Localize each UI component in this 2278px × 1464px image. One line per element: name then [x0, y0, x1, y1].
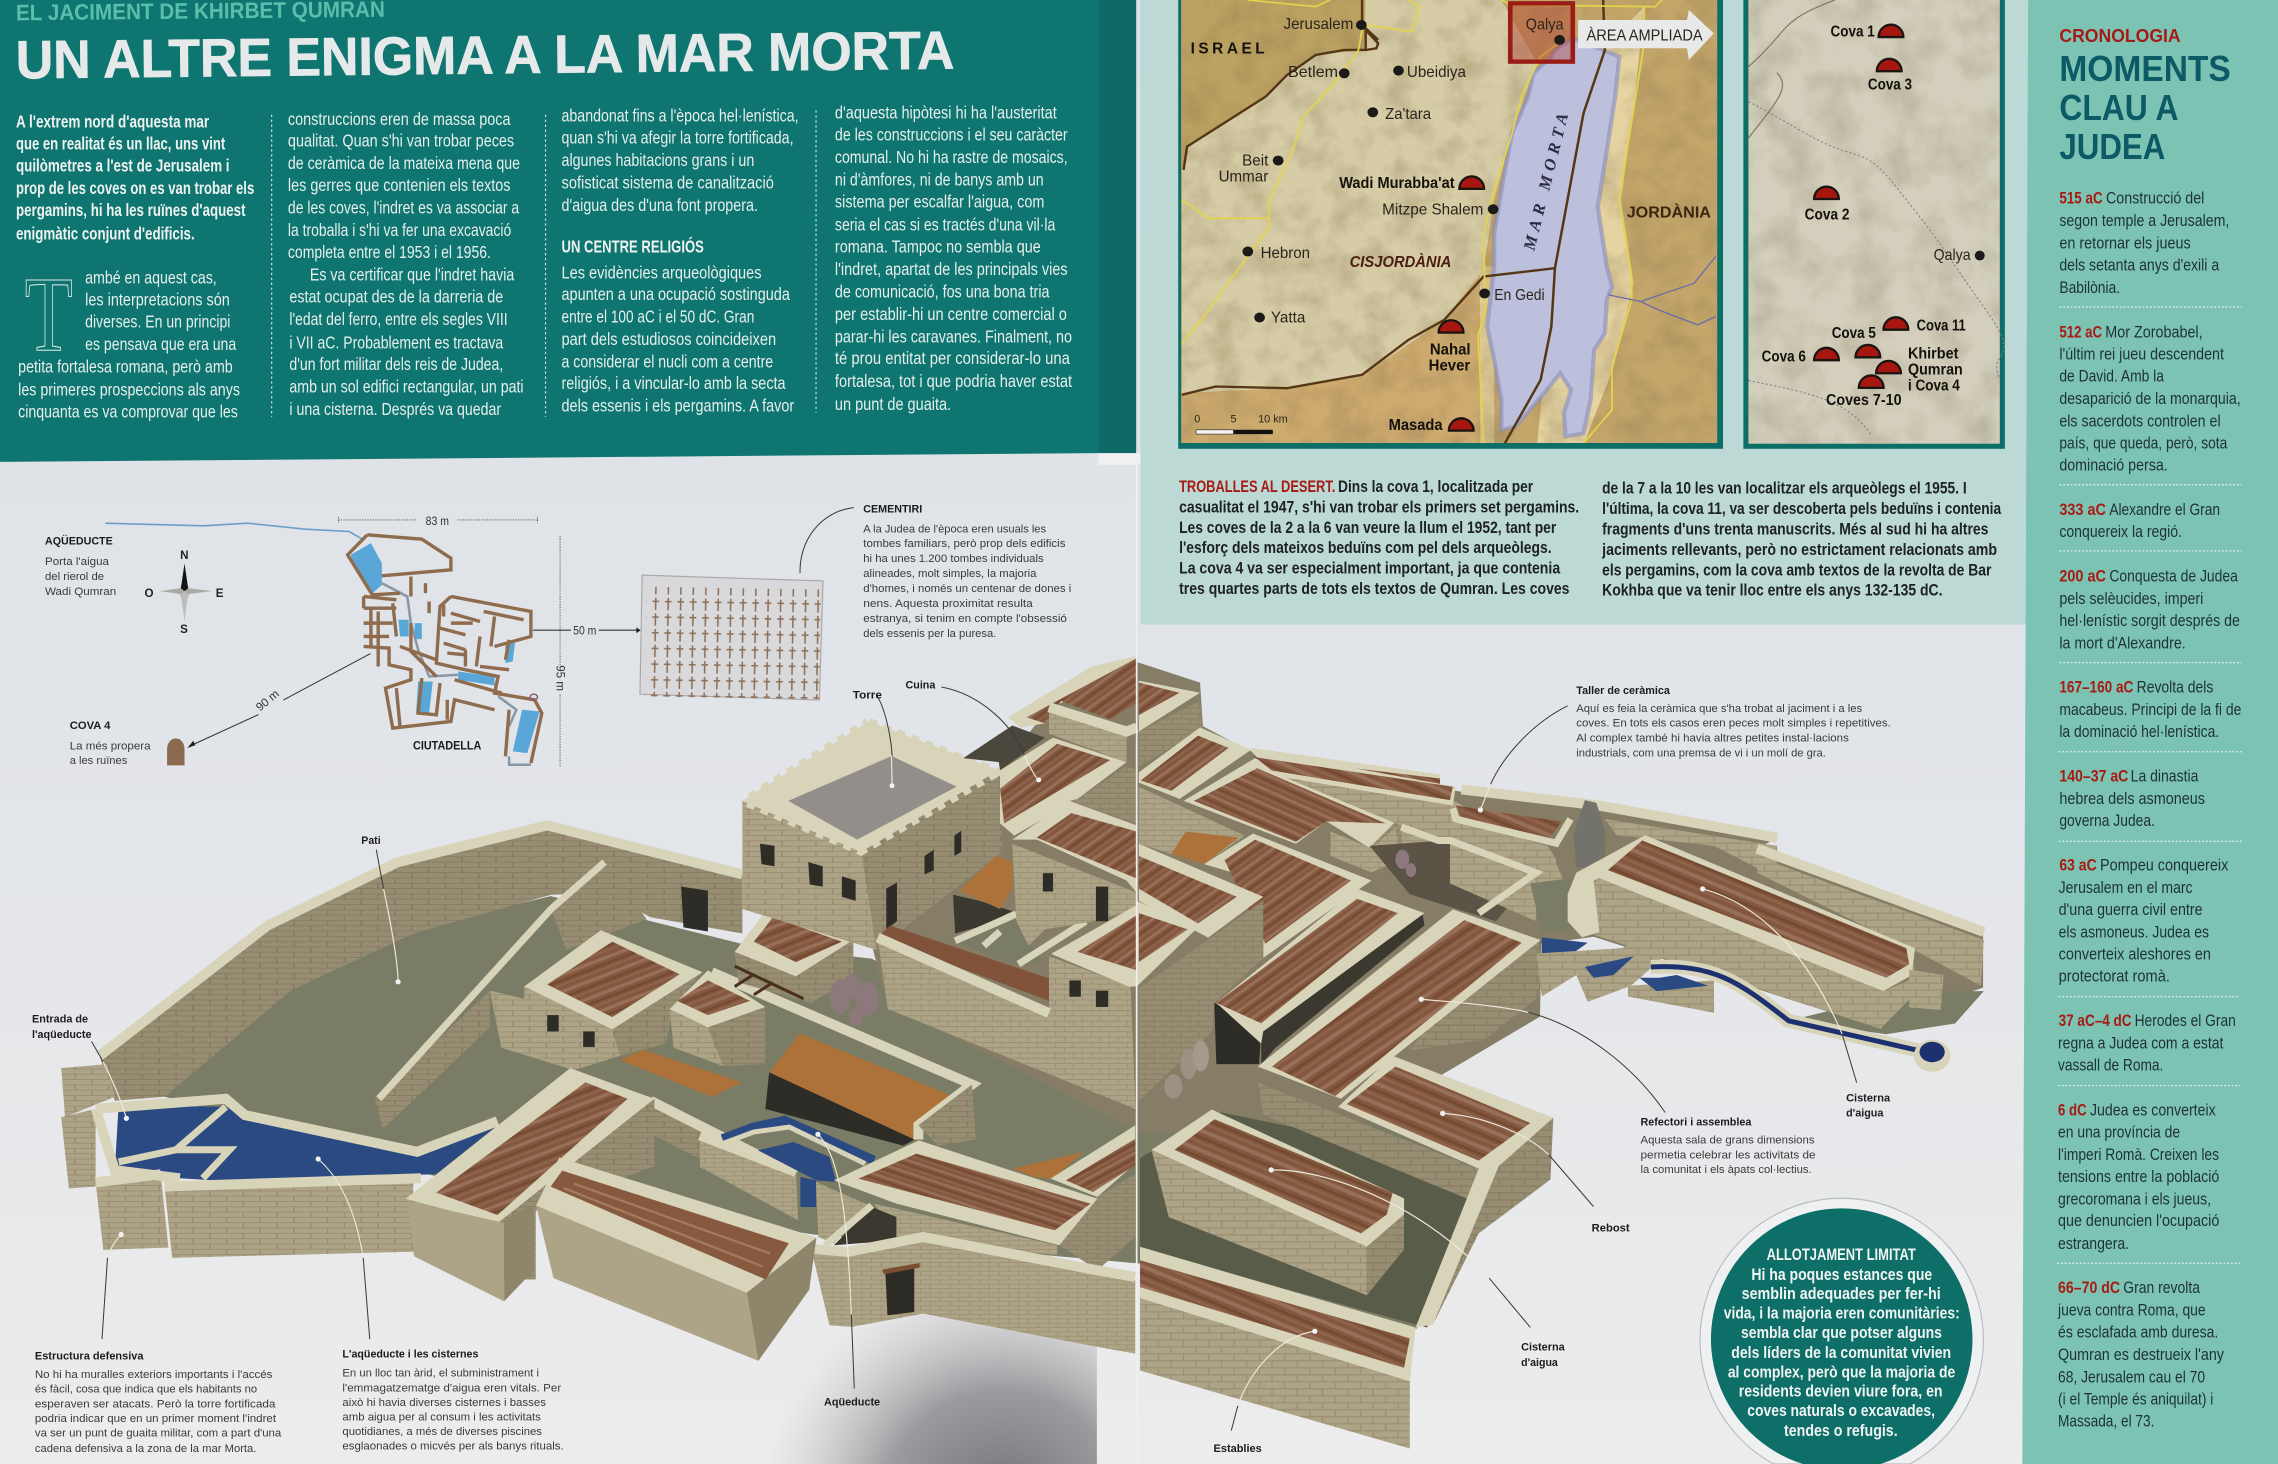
text column 4: ni d'àmfores, ni de banys amb un: [835, 169, 1044, 189]
site plan of Qumran: 90 m: [254, 687, 282, 714]
callout: Entrada de l'aqueducte: [32, 1013, 129, 1121]
callout: cemetery text: dels essenis per la puresa.: [863, 628, 996, 640]
text column 1: prop de les coves on es van trobar els: [16, 178, 254, 198]
text column 1: enigmàtic conjunt d'edificis.: [16, 223, 195, 243]
timeline entry 512 aC: Mor Zorobabel,: [2105, 324, 2203, 342]
text column 2: estat ocupat des de la darreria de: [289, 287, 503, 307]
text column 2: amb un sol edifici rectangular, un pati: [289, 377, 524, 397]
label: cave 4: COVA 4: [70, 720, 111, 732]
timeline entry 515 aC: segon temple a Jerusalem,: [2059, 212, 2229, 230]
text column 3: a considerar el nucli com a centre: [562, 351, 773, 371]
callout: Establies: [1214, 1329, 1317, 1455]
site plan of Qumran: 83 m: [426, 515, 449, 528]
timeline entry 167-160 aC: macabeus. Principi de la fi de: [2059, 701, 2241, 719]
timeline entry 6 dC: tensions entre la població: [2058, 1168, 2219, 1186]
callout: Cisterna (lower): [1269, 1167, 1565, 1369]
text block: troballes al desert: l'última, la cova 11, va ser descoberta pels beduïns i contenia: [1602, 500, 2002, 518]
map: enlarged cave area: Qumran: [1908, 361, 1963, 378]
timeline entry 66-70 dC: Gran revolta: [2123, 1279, 2201, 1297]
map: Dead Sea region: Hever: [1429, 357, 1470, 374]
timeline entry 6 dC: en una província de: [2058, 1123, 2180, 1141]
callout: Pati: Pati: [361, 835, 381, 847]
text column 3: UN CENTRE RELIGIÓS: [562, 236, 704, 257]
map: Dead Sea region: Qalya: [1526, 16, 1564, 33]
timeline entry 167-160 aC: [2059, 679, 2241, 741]
timeline entry 63 aC: els asmoneus. Judea es: [2059, 924, 2209, 942]
callout: Refectori i assemblea: permetia celebrar les activitats de: [1641, 1150, 1816, 1162]
callout: l'aqueducte i les cisternes: esglaonades o micvés per als banys rituals.: [342, 1440, 564, 1452]
callout: Taller de ceramica: [1478, 685, 1891, 812]
label: aqueduct note: del rierol de: [45, 571, 104, 583]
panel: chronology: JUDEA: [2059, 126, 2165, 167]
text column 2: de les coves, l'indret es va associar a: [288, 198, 519, 218]
callout circle: allotjament limitat: sembla clar que potser alguns: [1741, 1324, 1942, 1342]
timeline entry 515 aC: Construcció del: [2106, 190, 2204, 208]
timeline entry 512 aC: dominació persa.: [2059, 457, 2168, 475]
icon: compass: E: [216, 587, 224, 600]
text column 3: quan s'hi va afegir la torre fortificada,: [562, 128, 794, 148]
timeline entry 333 aC: 333 aC: [2059, 501, 2106, 519]
label: aqueduct note: AQÜEDUCTE: [45, 535, 113, 548]
text column 2: les gerres que contenien els textos: [288, 175, 511, 195]
callout: Aqueducte: [815, 1132, 880, 1408]
text block: troballes al desert: casualitat el 1947, s'hi van trobar els primers set pergamins.: [1179, 498, 1579, 516]
callout circle: allotjament limitat: vida, i la majoria eren comunitàries:: [1724, 1305, 1960, 1323]
map: enlarged cave area: Cova 6: [1762, 349, 1806, 366]
text column 4: [835, 102, 1072, 414]
text column 4: té prou entitat per considerar-lo una: [835, 348, 1070, 368]
callout: Rebost: [1440, 1111, 1630, 1235]
label: cave 4: [70, 720, 185, 767]
callout: Refectori i assemblea: la comunitat i els àpats col·lectius.: [1641, 1164, 1812, 1176]
map: Dead Sea region: Ubeidiya: [1407, 64, 1466, 81]
panel: chronology: MOMENTS: [2059, 48, 2231, 89]
callout: Taller de ceramica: coves. En tots els casos eren peces molt simples i repetitives.: [1576, 717, 1891, 729]
timeline entry 63 aC: [2059, 857, 2228, 986]
callout circle: allotjament limitat: Hi ha poques estances que: [1751, 1266, 1932, 1284]
callout: cemetery text: [800, 504, 1071, 640]
text column 2: qualitat. Quan s'hi van trobar peces: [288, 131, 514, 151]
timeline entry 512 aC: l'últim rei jueu descendent: [2059, 346, 2224, 364]
map: Dead Sea region: [1178, 0, 1723, 449]
callout: l'aqueducte i les cisternes: [316, 1156, 564, 1452]
timeline entry 512 aC: desaparició de la monarquia,: [2059, 390, 2241, 408]
north-east workshops, kiln and long roofed hall: [1249, 749, 1984, 1072]
map: Dead Sea region: 0: [1194, 414, 1200, 426]
text column 1: quilòmetres a l'est de Jerusalem i: [16, 156, 230, 176]
timeline entry 66-70 dC: 66–70 dC: [2058, 1279, 2120, 1297]
text block: troballes al desert: els pergamins, com la cova amb textos de la revolta de Bar: [1602, 561, 1992, 579]
timeline entry 140-37 aC: hebrea dels asmoneus: [2059, 790, 2205, 808]
ground: courtyard paving: [164, 896, 1482, 1329]
text column 3: religiós, i a vincular-lo amb la secta: [562, 373, 786, 393]
timeline entry 63 aC: protectorat romà.: [2059, 968, 2170, 986]
text column 4: de les construccions i el seu caràcter: [835, 125, 1068, 145]
timeline entry 200 aC: la mort d'Alexandre.: [2059, 634, 2186, 652]
text column 1: cinquanta es va comprovar que les: [18, 402, 238, 422]
timeline entry 37 aC-4 dC: Herodes el Gran: [2135, 1012, 2236, 1030]
map: Dead Sea region: Za'tara: [1385, 106, 1431, 123]
central tower: [742, 721, 1003, 950]
callout: Refectori i assemblea: Refectori i assemblea: [1641, 1117, 1752, 1129]
timeline entry 512 aC: [2059, 324, 2241, 475]
text column 1: petita fortalesa romana, però amb: [18, 357, 233, 377]
timeline entry 140-37 aC: La dinastia: [2131, 768, 2199, 786]
text column 2: construccions eren de massa poca: [288, 109, 511, 129]
map: enlarged cave area: Cova 5: [1832, 325, 1876, 342]
callout: Cisterna (right): [1700, 886, 1891, 1120]
callout: cemetery text: CEMENTIRI: [863, 504, 922, 516]
map: Dead Sea region: Nahal: [1430, 341, 1471, 358]
timeline entry 515 aC: [2059, 190, 2229, 297]
callout: Estructura defensiva: va ser un punt de guaita militar, com a part d'una: [35, 1427, 282, 1439]
illustration: Qumran complex, isometric reconstruction: [61, 656, 1984, 1449]
callout: Torre: Torre: [853, 690, 882, 702]
timeline entry 6 dC: 6 dC: [2058, 1101, 2087, 1119]
site plan of Qumran: CIUTADELLA: [413, 739, 482, 752]
panel: chronology: [2022, 0, 2278, 1464]
text column 3: sofisticat sistema de canalització: [562, 172, 774, 192]
cemetery diagram: [640, 575, 823, 700]
map: Dead Sea region: JORDÀNIA: [1627, 202, 1711, 221]
callout: Rebost: Rebost: [1592, 1223, 1630, 1235]
map: Dead Sea region: Masada: [1389, 417, 1443, 434]
label: cave 4: La més propera: [70, 740, 151, 752]
site plan of Qumran: [105, 515, 641, 767]
timeline entry 66-70 dC: (i el Temple és aniquilat) i: [2058, 1391, 2213, 1409]
text column 3: entre el 100 aC i el 50 dC. Gran: [562, 307, 754, 327]
text column 3: Les evidències arqueològiques: [562, 262, 762, 282]
map: Dead Sea region: Jerusalem: [1284, 16, 1353, 33]
text column 4: parar-hi les caravanes. Finalment, no: [835, 326, 1072, 346]
timeline entry 66-70 dC: Qumran es destrueix l'any: [2058, 1346, 2225, 1364]
timeline entry 515 aC: Babilònia.: [2059, 279, 2120, 297]
timeline entry 515 aC: en retornar els jueus: [2059, 234, 2191, 252]
map: Dead Sea region: Beit: [1242, 153, 1269, 170]
timeline entry 66-70 dC: 68, Jerusalem cau el 70: [2058, 1369, 2205, 1387]
label: aqueduct note: Porta l'aigua: [45, 556, 110, 568]
map: enlarged cave area: Cova 3: [1868, 76, 1912, 93]
map: Dead Sea region: 10 km: [1258, 414, 1288, 426]
timeline entry 63 aC: Jerusalem en el marc: [2059, 879, 2193, 897]
callout: Estructura defensiva: Estructura defensiva: [35, 1350, 144, 1362]
callout: Estructura defensiva: [35, 1232, 282, 1455]
icon: compass: S: [180, 623, 188, 636]
map: Dead Sea region: MAR MORTA: [1519, 111, 1572, 253]
timeline entry 167-160 aC: la dominació hel·lenística.: [2059, 723, 2219, 741]
timeline entry 37 aC-4 dC: 37 aC–4 dC: [2059, 1012, 2132, 1030]
text column 4: l'indret, apartat de les principals vies: [835, 259, 1068, 279]
timeline entry 515 aC: dels setanta anys d'exili a: [2059, 257, 2220, 275]
timeline entry 6 dC: l'imperi Romà. Creixen les: [2058, 1146, 2219, 1164]
map: Dead Sea region: CISJORDÀNIA: [1350, 254, 1451, 271]
map: Dead Sea region: 5: [1231, 414, 1237, 426]
text block: troballes al desert: de la 7 a la 10 les van localitzar els arqueòlegs el 1955. I: [1602, 479, 1967, 497]
map: Dead Sea region: Hebron: [1261, 245, 1310, 262]
callout: Cisterna (lower): d'aigua: [1521, 1357, 1558, 1369]
timeline entry 66-70 dC: Massada, el 73.: [2058, 1413, 2154, 1431]
panel: maps and finds: [1140, 0, 2028, 625]
text column 4: per establir-hi un centre comercial o: [835, 304, 1067, 324]
text column 2: i una cisterna. Després va quedar: [289, 399, 501, 419]
masonry mass behind the roofs: [872, 661, 1983, 1133]
callout: Cuina: Cuina: [906, 679, 936, 691]
callout: Taller de ceramica: Aquí es feia la ceràmica que s'ha trobat al jaciment i a les: [1576, 703, 1863, 715]
callout: Entrada de l'aqueducte: Entrada de: [32, 1013, 88, 1025]
timeline entry 333 aC: Alexandre el Gran: [2109, 501, 2220, 519]
west wing: [61, 825, 976, 1279]
callout: Cisterna (lower): Cisterna: [1521, 1342, 1565, 1354]
timeline entry 140-37 aC: governa Judea.: [2059, 812, 2155, 830]
timeline entry 63 aC: 63 aC: [2059, 857, 2097, 875]
map: Dead Sea region: ÀREA AMPLIADA: [1586, 28, 1703, 45]
timeline entry 200 aC: 200 aC: [2059, 567, 2106, 585]
callout: Pati: [361, 835, 401, 984]
timeline entry 63 aC: d'una guerra civil entre: [2059, 901, 2203, 919]
text column 2: completa entre el 1953 i el 1956.: [288, 242, 491, 262]
map: Dead Sea region: Betlem: [1288, 64, 1338, 81]
timeline entry 167-160 aC: Revolta dels: [2137, 679, 2213, 697]
text column 3: part dels estudiosos coincideixen: [562, 329, 776, 349]
map: enlarged cave area: Khirbet: [1908, 345, 1958, 362]
callout: Estructura defensiva: esperaven ser atacats. Però la torre fortificada: [35, 1398, 276, 1410]
timeline entry 37 aC-4 dC: regna a Judea com a estat: [2058, 1034, 2224, 1052]
text column 3: algunes habitacions grans i un: [562, 150, 754, 170]
text block: troballes al desert: La cova 4 va ser especialment important, ja que contenia: [1179, 560, 1561, 578]
timeline entry 333 aC: conquereix la regió.: [2059, 523, 2182, 541]
timeline entry 167-160 aC: 167–160 aC: [2059, 679, 2134, 697]
callout: cemetery text: nens. Aquesta proximitat resulta: [863, 598, 1034, 610]
text column 1: pergamins, hi ha les ruïnes d'aquest: [16, 200, 246, 220]
text column 3: [562, 106, 799, 416]
map: Dead Sea region: Mitzpe Shalem: [1382, 202, 1483, 219]
callout circle: allotjament limitat: dels líders de la comunitat vivien: [1731, 1344, 1951, 1362]
callout: Taller de ceramica: Taller de ceràmica: [1576, 685, 1671, 697]
callout: l'aqueducte i les cisternes: l'emmagatzematge d'aigua eren vitals. Per: [342, 1382, 562, 1394]
timeline entry 63 aC: Pompeu conquereix: [2100, 857, 2228, 875]
timeline entry 200 aC: Conquesta de Judea: [2109, 567, 2239, 585]
page fold line: [1136, 465, 1138, 1464]
site plan of Qumran: 95 m: [553, 665, 566, 691]
timeline entry 512 aC: 512 aC: [2059, 324, 2102, 342]
callout circle: allotjament limitat: semblin adequades per fer-hi: [1742, 1285, 1941, 1303]
timeline entry 6 dC: Judea es converteix: [2090, 1101, 2216, 1119]
map: enlarged cave area: Cova 2: [1805, 206, 1849, 223]
shadow at the bottom of the left page: [763, 1278, 1097, 1464]
text column 4: un punt de guaita.: [835, 394, 951, 414]
callout circle: allotjament limitat: [1700, 1198, 1983, 1464]
timeline entry 6 dC: [2058, 1101, 2219, 1253]
text block: troballes al desert: TROBALLES AL DESERT.: [1179, 478, 1335, 496]
text column 1: es pensava que era una: [85, 334, 236, 354]
timeline entry 6 dC: que denuncien l'ocupació: [2058, 1212, 2219, 1230]
text column 2: i VII aC. Probablement es tractava: [289, 332, 503, 352]
east wing: [1137, 681, 1440, 1101]
text column 4: fortalesa, tot i que podria haver estat: [835, 371, 1072, 391]
callout: Estructura defensiva: No hi ha muralles exteriors importants i l'accés: [35, 1369, 273, 1381]
callout: Cuina: [906, 679, 1041, 782]
text column 1: que en realitat és un llac, uns vint: [16, 133, 225, 153]
map: Dead Sea region: Wadi Murabba'at: [1339, 175, 1455, 192]
map: enlarged cave area: [1743, 0, 2005, 449]
icon: compass: N: [180, 549, 189, 562]
callout: Establies: Establies: [1214, 1443, 1262, 1455]
text column 1: T: [25, 255, 73, 374]
callout: l'aqueducte i les cisternes: amb aigua per al consum i les activitats: [342, 1412, 541, 1424]
label: aqueduct note: [45, 535, 116, 598]
title: UN ALTRE ENIGMA A LA MAR MORTA: [15, 21, 955, 90]
callout: cemetery text: tombes familiars, però prop dels edificis: [863, 538, 1066, 550]
map: enlarged cave area: Cova 11: [1917, 317, 1966, 334]
text column 4: romana. Tampoc no sembla que: [835, 236, 1041, 256]
text column 2: [288, 109, 524, 419]
callout: Aqueducte: Aqüeducte: [824, 1396, 880, 1408]
text column 2: d'un fort militar dels reis de Judea,: [289, 354, 503, 374]
timeline entry 66-70 dC: jueva contra Roma, que: [2057, 1302, 2206, 1320]
map: enlarged cave area: i Cova 4: [1908, 378, 1960, 395]
callout circle: allotjament limitat: al complex, però que la majoria de: [1728, 1363, 1955, 1381]
panel: chronology: CRONOLOGIA: [2059, 25, 2181, 46]
text column 4: seria el cas si es tractés d'una vil·la: [835, 214, 1055, 234]
text column 2: de ceràmica de la mateixa mena que: [288, 153, 520, 173]
callout circle: allotjament limitat: coves naturals o excavades,: [1747, 1402, 1935, 1420]
text column 1: ambé en aquest cas,: [85, 267, 217, 287]
callout circle: allotjament limitat: residents devien viure fora, en: [1739, 1383, 1943, 1401]
timeline entry 6 dC: estrangera.: [2058, 1235, 2129, 1253]
text column 2: Es va certificar que l'indret havia: [310, 264, 514, 284]
text column 3: dels essenis i els pergamins. A favor: [562, 396, 794, 416]
callout: Estructura defensiva: és fàcil, cosa que indica que els habitants no: [35, 1384, 257, 1396]
panel: intro teal header: [0, 0, 1140, 465]
timeline entry 37 aC-4 dC: [2058, 1012, 2236, 1074]
label: cave 4: a les ruïnes: [70, 755, 128, 767]
text column 1: [16, 112, 254, 422]
callout: Refectori i assemblea: Aquesta sala de grans dimensions: [1641, 1134, 1815, 1146]
callout: cemetery text: alineades, molt simples, la majoria: [863, 568, 1037, 580]
text column 2: l'edat del ferro, entre els segles VIII: [289, 309, 508, 329]
text column 2: la troballa i s'hi va fer una excavació: [288, 220, 511, 240]
text column 4: comunal. No hi ha rastre de mosaics,: [835, 147, 1068, 167]
callout: Entrada de l'aqueducte: l'aqüeducte: [32, 1029, 92, 1041]
callout: l'aqueducte i les cisternes: això hi havia diverses cisternes i basses: [342, 1397, 546, 1409]
timeline entry 66-70 dC: és esclafada amb duresa.: [2058, 1324, 2218, 1342]
callout: l'aqueducte i les cisternes: L'aqüeducte i les cisternes: [342, 1349, 478, 1361]
panel: chronology: CLAU A: [2059, 87, 2178, 128]
refectory, pantry and cistern blocks: [1140, 909, 1553, 1449]
timeline entry 200 aC: pels selèucides, imperi: [2059, 590, 2203, 608]
text column 4: d'aquesta hipòtesi hi ha l'austeritat: [835, 102, 1057, 122]
callout: Estructura defensiva: podria indicar que en un primer moment l'indret: [35, 1413, 276, 1425]
callout: cemetery text: estranya, si tenim en compte l'obsessió: [863, 613, 1067, 625]
text block: troballes al desert: [1179, 478, 2002, 599]
text column 1: diverses. En un principi: [85, 312, 230, 332]
map: enlarged cave area: Qalya: [1934, 247, 1971, 264]
timeline entry 512 aC: país, que queda, però, sota: [2059, 434, 2228, 452]
lower roofed block: [408, 1158, 816, 1361]
label: aqueduct note: Wadi Qumran: [45, 586, 116, 598]
timeline entry 37 aC-4 dC: vassall de Roma.: [2058, 1056, 2163, 1074]
text column 3: d'aigua des d'una font propera.: [562, 195, 758, 215]
timeline entry 512 aC: de David. Amb la: [2059, 367, 2165, 385]
text column 1: A l'extrem nord d'aquesta mar: [16, 112, 209, 132]
map: enlarged cave area: Coves 7-10: [1826, 392, 1902, 409]
timeline entry 515 aC: 515 aC: [2059, 190, 2103, 208]
timeline entry 140-37 aC: 140–37 aC: [2059, 768, 2129, 786]
timeline entry 512 aC: els sacerdots controlen el: [2059, 412, 2221, 430]
map: enlarged cave area: Cova 1: [1831, 24, 1875, 41]
text column 3: abandonat fins a l'època hel·lenística,: [562, 106, 799, 126]
callout: cemetery text: A la Judea de l'època eren usuals les: [863, 524, 1047, 536]
map: Dead Sea region: ISRAEL: [1191, 41, 1265, 58]
icon: compass: O: [145, 587, 154, 600]
text column 4: de comunicació, fos una bona tria: [835, 281, 1050, 301]
callout: l'aqueducte i les cisternes: En un lloc tan àrid, el subministrament i: [342, 1367, 539, 1379]
timeline entry 63 aC: converteix aleshores en: [2059, 946, 2211, 964]
timeline entry 6 dC: grecoromana i els jueus,: [2058, 1190, 2211, 1208]
site plan of Qumran: 50 m: [573, 625, 596, 638]
callout circle: allotjament limitat: ALLOTJAMENT LIMITAT: [1767, 1246, 1916, 1264]
timeline entry 200 aC: [2059, 567, 2240, 652]
timeline entry 140-37 aC: [2059, 768, 2205, 830]
text block: troballes al desert: Les coves de la 2 a la 6 van veure la llum el 1952, tant per: [1179, 519, 1557, 537]
text block: troballes al desert: Dins la cova 1, localitzada per: [1338, 478, 1534, 496]
callout: Refectori i assemblea: [1419, 997, 1816, 1176]
text block: troballes al desert: fragments d'uns trenta manuscrits. Més al sud hi ha altres: [1602, 520, 1988, 538]
timeline entry 200 aC: hel·lenístic sorgit després de: [2059, 612, 2240, 630]
text block: troballes al desert: Kokhba que va tenir lloc entre els anys 132-135 dC.: [1602, 581, 1943, 599]
callout: Taller de ceramica: industrials, com una premsa de vi i un molí de gra.: [1576, 748, 1826, 760]
callout circle: allotjament limitat: tendes o refugis.: [1784, 1422, 1898, 1440]
callout: cemetery text: hi ha unes 1.200 tombes individuals: [863, 553, 1044, 565]
text block: troballes al desert: l'esforç dels mateixos beduïns com pel dels arqueòlegs.: [1179, 539, 1552, 557]
callout: Estructura defensiva: cadena defensiva a la zona de la mar Morta.: [35, 1443, 256, 1455]
lower central block with wall and pool: [700, 1120, 1135, 1354]
map: Dead Sea region: En Gedi: [1494, 287, 1545, 304]
text column 3: apunten a una ocupació sostinguda: [562, 284, 790, 304]
text column 1: les primeres prospeccions als anys: [18, 380, 240, 400]
callout: Torre: [853, 690, 894, 788]
callout: Cisterna (right): Cisterna: [1846, 1092, 1891, 1104]
icon: compass: [145, 549, 224, 636]
timeline entry 66-70 dC: [2057, 1279, 2225, 1431]
text column 1: les interpretacions són: [85, 290, 230, 310]
text block: troballes al desert: jaciments rellevants, però no estrictament relacionats amb: [1601, 541, 1997, 559]
east side of the west page: [878, 656, 1137, 1109]
callout: Cisterna (right): d'aigua: [1846, 1108, 1884, 1120]
text block: troballes al desert: tres quartes parts de tots els textos de Qumran. Les coves: [1179, 580, 1569, 598]
text column 4: sistema per escalfar l'aigua, com: [835, 192, 1044, 212]
callout: l'aqueducte i les cisternes: quotidianes, a més de diverses piscines: [342, 1426, 542, 1438]
timeline entry 333 aC: [2059, 501, 2220, 541]
callout: cemetery text: d'homes, i només un centenar de dones i: [863, 583, 1071, 595]
map: Dead Sea region: Ummar: [1219, 169, 1268, 186]
map: Dead Sea region: Yatta: [1271, 309, 1306, 326]
callout: Taller de ceramica: Al complex també hi havia altres petites instal·lacions: [1576, 733, 1849, 745]
